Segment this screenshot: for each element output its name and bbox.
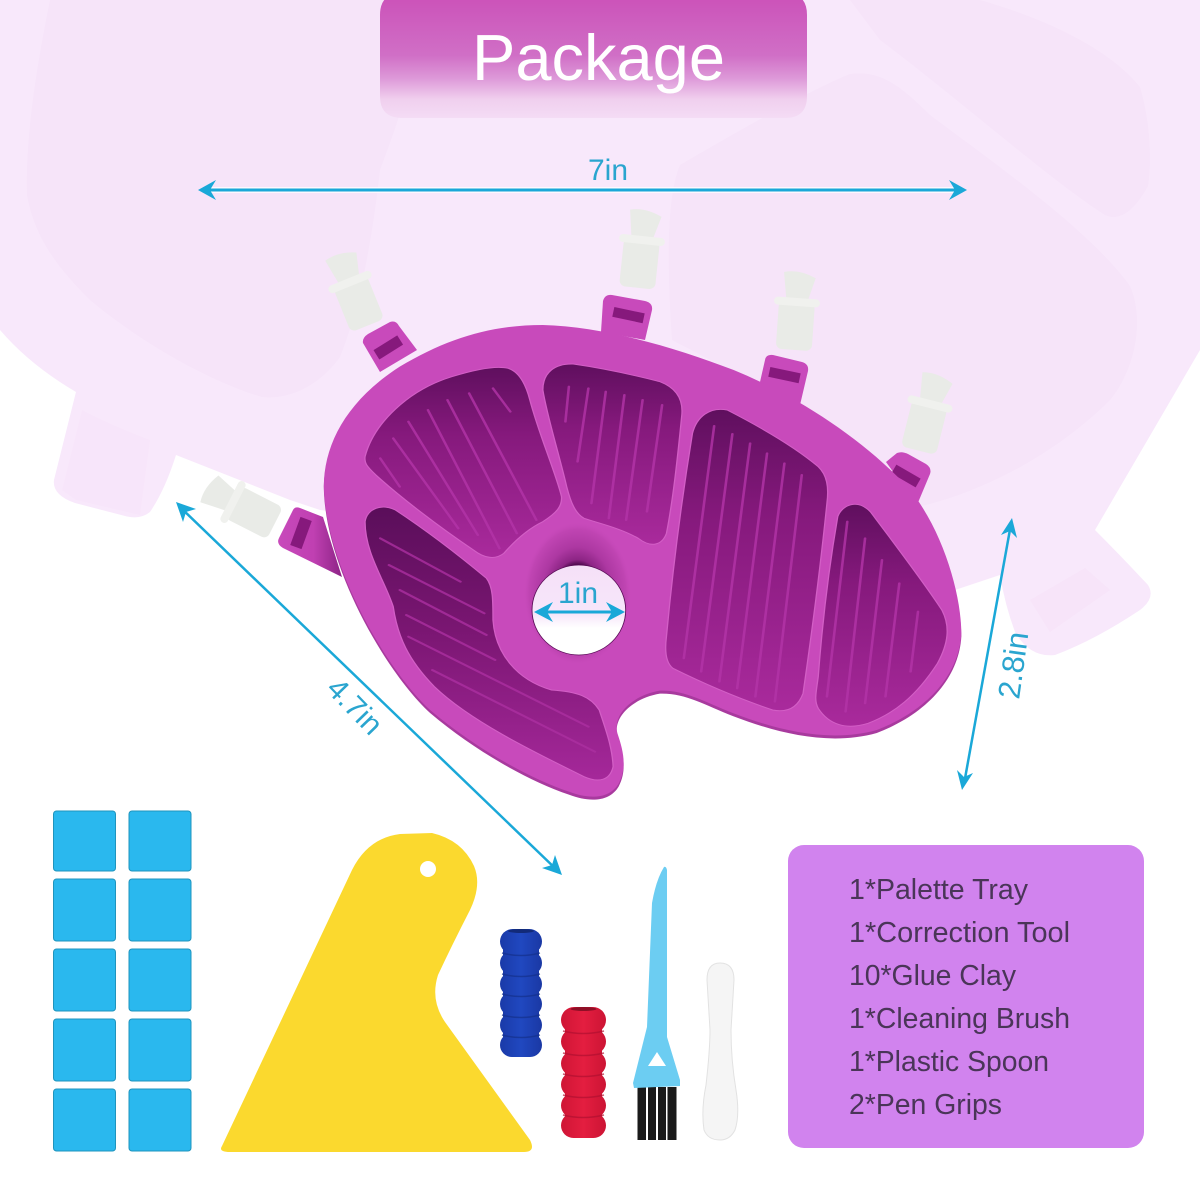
well 5 xyxy=(365,507,613,780)
dimension: 7in width arrow xyxy=(198,154,967,200)
contents list panel: 1*Plastic Spoon xyxy=(849,1046,1049,1078)
well 3 xyxy=(666,409,828,711)
yellow correction tool scraper xyxy=(221,833,532,1152)
dimension: 4.7in depth arrow: 4.7in xyxy=(320,672,389,742)
dimension: 2.8in height arrow: 2.8in xyxy=(991,630,1035,701)
peg 2 xyxy=(614,207,668,290)
peg 5 xyxy=(196,468,285,544)
contents list panel: 2*Pen Grips xyxy=(849,1089,1002,1121)
centre dimple xyxy=(523,522,632,665)
tab 1 xyxy=(363,322,417,372)
peg 3 xyxy=(771,270,822,351)
tab 5 xyxy=(278,507,342,577)
glue clay blue squares xyxy=(54,811,191,1151)
palette tray mounting tabs xyxy=(278,295,931,577)
tray underside rim xyxy=(324,328,961,800)
cleaning brush xyxy=(633,867,680,1140)
tab 4 xyxy=(886,452,930,505)
bristles xyxy=(638,1087,676,1140)
blue pen grip xyxy=(500,929,542,1057)
contents list panel: 1*Correction Tool xyxy=(849,917,1070,949)
title banner: Package xyxy=(472,21,725,94)
dimension: 4.7in depth arrow xyxy=(176,502,562,875)
background: ghost palette xyxy=(0,0,1200,655)
plastic spoon xyxy=(703,963,738,1140)
tray body xyxy=(324,325,961,797)
tab 3 xyxy=(760,355,808,405)
contents list panel: 1*Palette Tray xyxy=(849,874,1029,906)
contents list panel: 10*Glue Clay xyxy=(849,960,1017,992)
title banner xyxy=(380,0,807,118)
dimension: 2.8in height arrow xyxy=(957,518,1035,790)
tab 2 xyxy=(601,295,652,340)
dimension: 1in hole arrow xyxy=(534,577,625,622)
well 1 xyxy=(365,367,562,557)
white mounting pegs xyxy=(196,207,960,544)
palette tray xyxy=(324,325,961,800)
peg 1 xyxy=(317,245,389,334)
thumb hole xyxy=(532,565,626,655)
well 2 xyxy=(543,364,682,544)
well 4 xyxy=(816,504,947,726)
dimension: 1in hole arrow: 1in xyxy=(558,577,598,610)
red pen grip xyxy=(561,1007,606,1138)
dimension: 7in width arrow: 7in xyxy=(588,154,628,187)
contents list panel xyxy=(788,845,1144,1148)
contents list panel: 1*Cleaning Brush xyxy=(849,1003,1070,1035)
peg 4 xyxy=(896,369,960,456)
